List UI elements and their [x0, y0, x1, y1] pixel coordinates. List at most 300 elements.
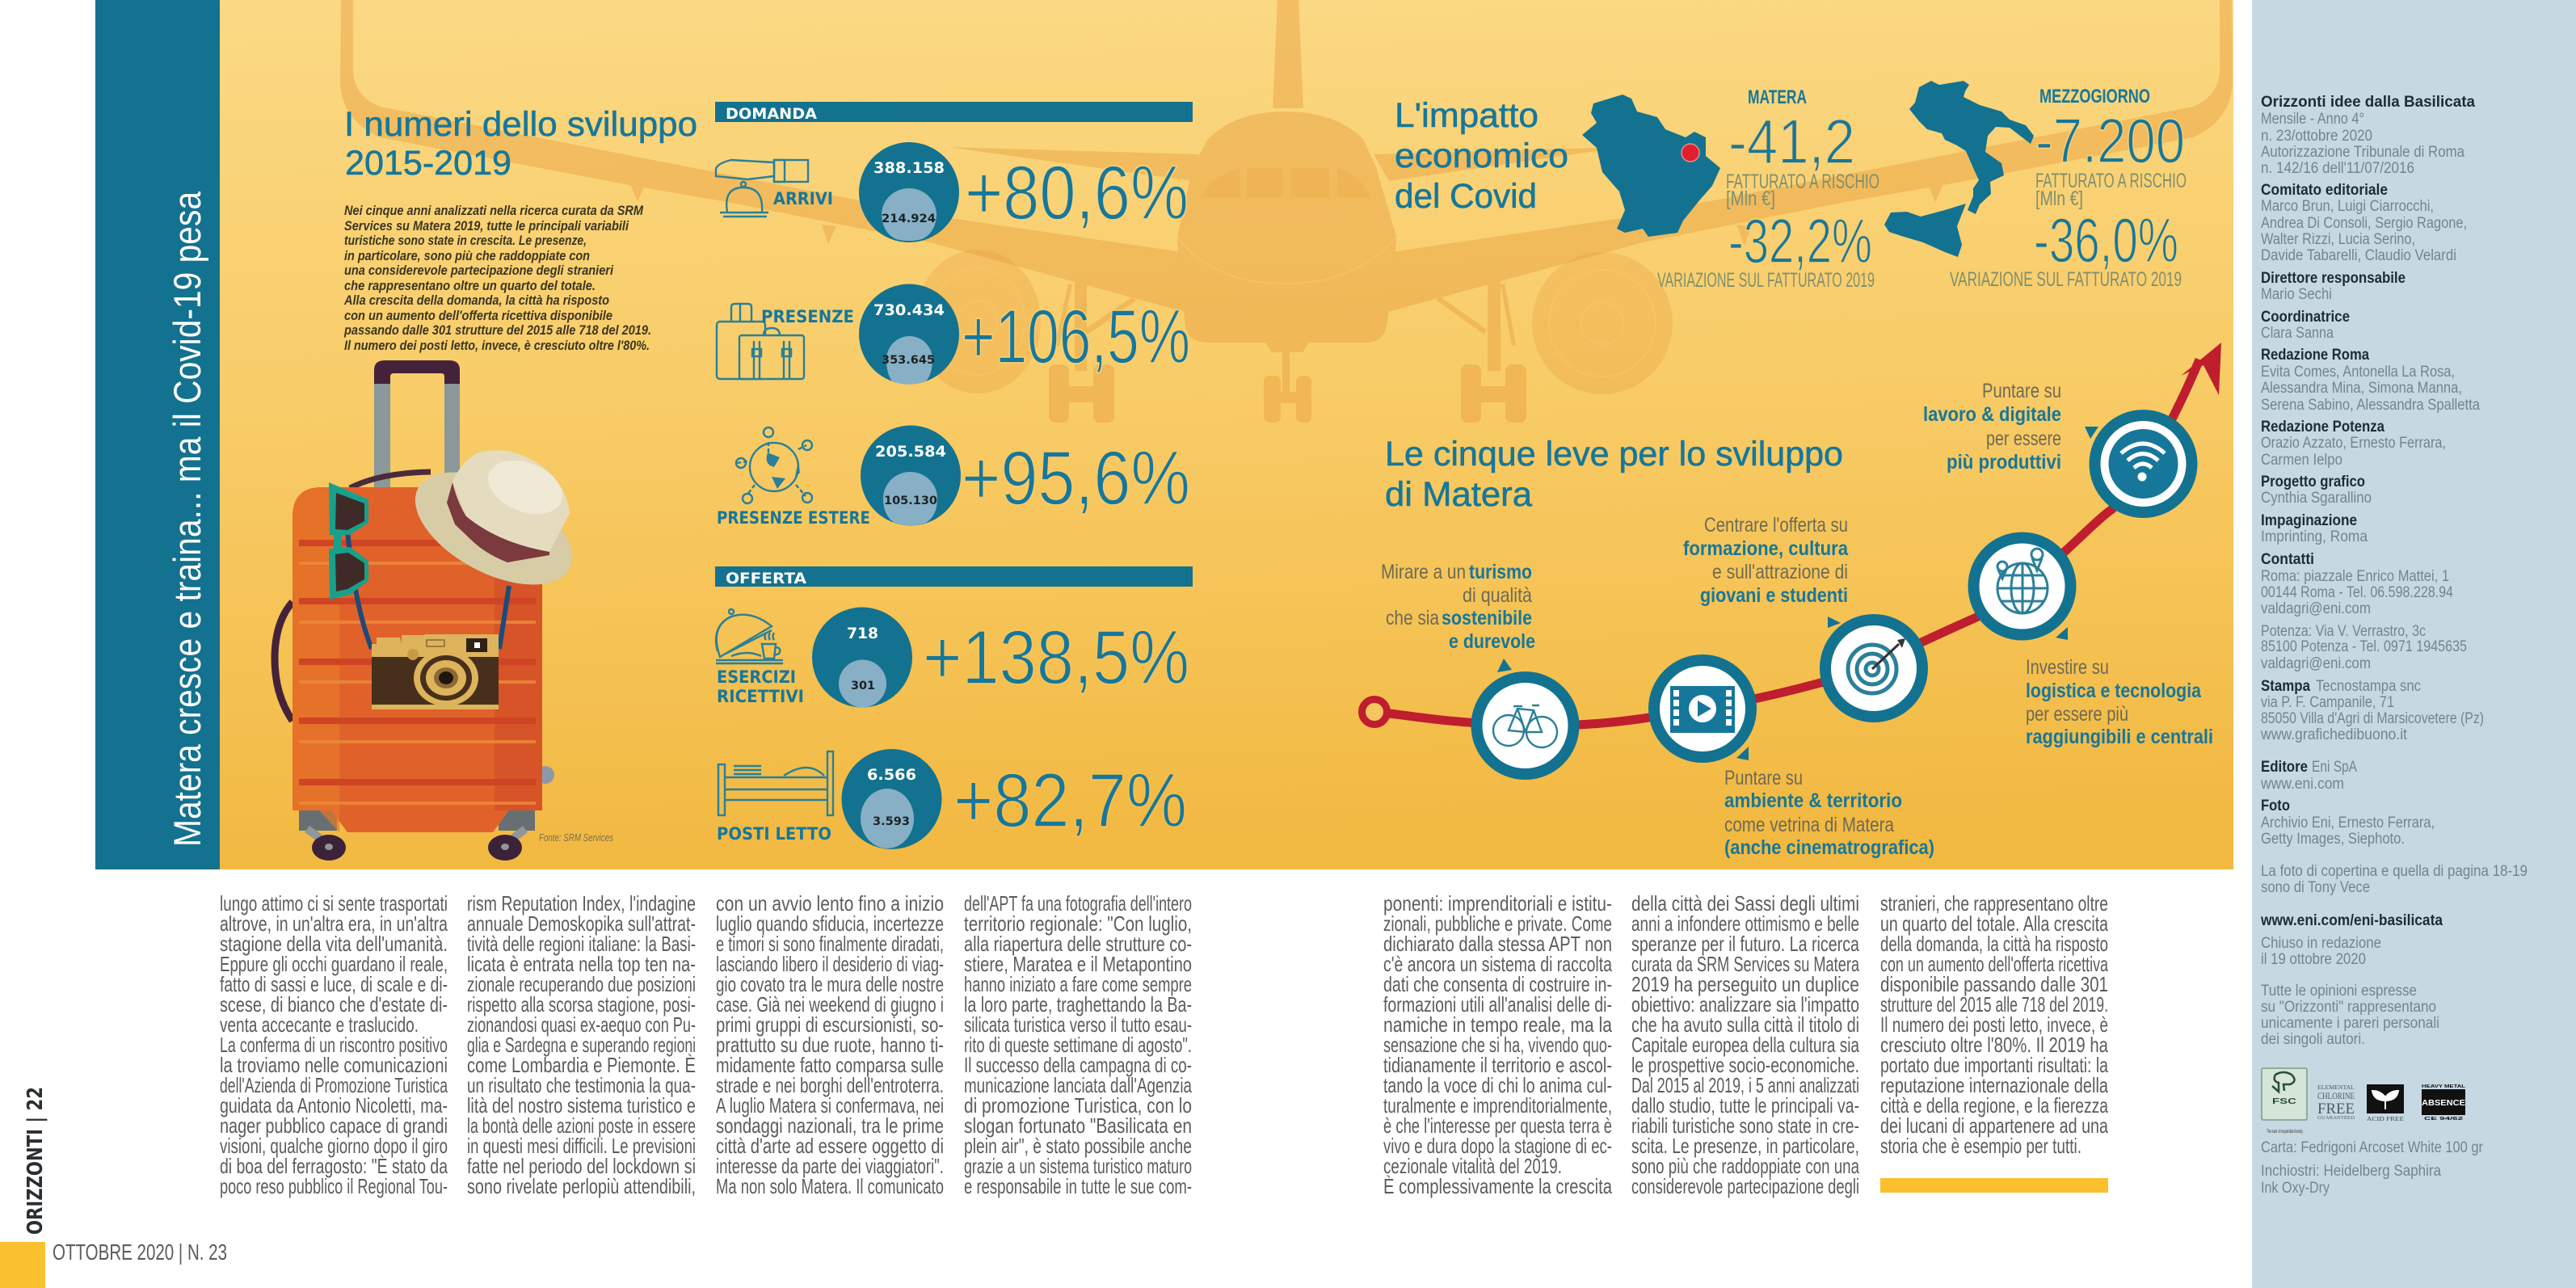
article text: column 6: dallo studio, tutte le principali va- — [1631, 1093, 1859, 1118]
article text: column 2: zionandosi quasi ex-aequo con Pu- — [467, 1012, 696, 1037]
text: lever 3: giovani e studenti — [1700, 584, 1848, 607]
article text: column 2: rispetto alla scorsa stagione, posi- — [467, 992, 696, 1017]
label: Mezzogiorno: MEZZOGIORNO — [2039, 86, 2150, 107]
text block: intro: passando dalle 301 strutture del 2015 alle 718 del 2019. — [343, 322, 651, 338]
panel: infographic background — [219, 0, 2233, 869]
text: lever 1: Mirare a un — [1381, 561, 1466, 583]
article text: column 4: hanno iniziato a fare come sempre — [964, 972, 1192, 996]
article text: column 7: portato due importanti risultati: la — [1880, 1053, 2108, 1077]
value: +138,5%: +138,5% — [923, 615, 1189, 701]
text block: intro: Services su Matera 2019, tutte le principali variabili — [344, 218, 629, 234]
bubble: arrivi values — [859, 142, 959, 242]
row: presenze — [717, 284, 1190, 385]
label: Matera: MATERA — [1748, 86, 1807, 108]
masthead credits: Mario Sechi — [2261, 286, 2332, 303]
paper and ink notes: Carta: Fedrigoni Arcoset White 100 gr — [2261, 1139, 2484, 1156]
logo: acid free — [2367, 1084, 2404, 1122]
article text: column 3 — [716, 891, 944, 1198]
bubble: presenze estere values: 205.584 — [875, 443, 946, 461]
bubble: presenze estere values: 105.130 — [884, 495, 937, 507]
masthead credits: Marco Brun, Luigi Ciarrocchi, — [2261, 198, 2434, 215]
value: +80,6%: +80,6% — [965, 150, 1189, 236]
masthead credits: valdagri@eni.com — [2261, 600, 2371, 617]
top strap — [350, 472, 431, 488]
lever 5: work and digital — [1923, 380, 2198, 518]
article text: column 3: sondaggi nazionali, tra le prime — [716, 1113, 944, 1138]
heading: L'impatto economico del Covid: economico — [1395, 137, 1568, 175]
article text: column 3: lasciando libero il desiderio di viag- — [716, 952, 944, 976]
article text: column 1: nager pubblico capace di grandi — [220, 1113, 448, 1138]
article text: column 5: dati che consenta di costruire in- — [1383, 972, 1612, 996]
hat — [398, 449, 590, 608]
text: lever 3 — [1683, 514, 1849, 607]
article text: column 3: midamente fatto comparsa sulle — [716, 1053, 944, 1077]
article text: column 6: curata da SRM Services su Matera — [1631, 952, 1859, 976]
article text: column 7: disponibile passando dalle 301 — [1880, 972, 2108, 996]
map: southern Italy — [1884, 81, 2034, 257]
pointer — [1828, 617, 1841, 628]
article text: column 4: dell'APT fa una fotografia dell'intero — [964, 891, 1192, 915]
label: arrivi: ARRIVI — [773, 189, 833, 208]
article text: column 6: che ha avuto sulla città il titolo di — [1631, 1012, 1859, 1037]
section bar: DOMANDA — [715, 102, 1193, 123]
logo: heavy metal absence: HEAVY METAL — [2422, 1084, 2465, 1089]
article text: column 1: venta accecante e traslucido. — [220, 1012, 419, 1037]
article text: column 3: primi gruppi di escursionisti, so- — [716, 1012, 944, 1037]
masthead credits: 85100 Potenza - Tel. 0971 1945635 — [2261, 638, 2467, 655]
caption: fatturato a rischio: FATTURATO A RISCHIO — [2035, 170, 2187, 192]
article text: column 3: strade e nei borghi dell'entroterra. — [716, 1073, 944, 1097]
heading: I numeri dello sviluppo — [344, 105, 697, 183]
footer: yellow corner tab — [0, 1242, 45, 1288]
heading: Le cinque leve: Le cinque leve per lo sviluppo — [1385, 435, 1843, 474]
label: esercizi ricettivi: RICETTIVI — [717, 687, 804, 706]
bubble: presenze values: 353.645 — [882, 354, 935, 367]
logo: elemental chlorine free: FREE — [2317, 1101, 2355, 1118]
value: -41,2: -41,2 — [1728, 106, 1855, 177]
article text: column 2: sono rivelate perlopiù attendibili, — [467, 1174, 696, 1198]
caption: fatturato a rischio: FATTURATO A RISCHIO — [1726, 170, 1879, 193]
text: lever 2: (anche cinematrografica) — [1724, 836, 1934, 859]
article text: column 3: interesse da parte dei viaggiatori". — [716, 1154, 944, 1178]
text block: intro: Nei cinque anni analizzati nella ricerca curata da SRM — [344, 203, 644, 218]
article text: column 3: città d'arte ad essere oggetto di — [716, 1134, 944, 1158]
bubble: arrivi values: 214.924 — [882, 213, 936, 225]
label: esercizi ricettivi: ESERCIZI — [717, 667, 796, 687]
article text: column 7: strutture del 2015 alle 718 del 2019. — [1880, 992, 2108, 1017]
masthead credits: Editore — [2261, 759, 2308, 776]
paper and ink notes — [2261, 1139, 2484, 1197]
masthead credits: Tecnostampa snc — [2316, 678, 2421, 695]
bubble: posti letto values — [842, 749, 942, 849]
icon: target — [1820, 614, 1928, 722]
logo: elemental chlorine free: CHLORINE — [2317, 1090, 2355, 1101]
article text: column 2: tività delle regioni italiane: la Basi- — [467, 932, 696, 956]
article text: column 1: fatto di sassi e luce, di scale e di- — [220, 972, 448, 996]
article text: column 2: come Lombardia e Piemonte. È — [467, 1053, 696, 1077]
text: lever 5: lavoro & digitale — [1923, 403, 2061, 426]
logo: heavy metal absence — [2422, 1084, 2465, 1122]
icon: bicycle — [1471, 671, 1579, 780]
article text: column 5: turalmente e imprenditorialmente, — [1383, 1093, 1612, 1118]
article text: column 6 — [1631, 891, 1859, 1198]
logo: elemental chlorine free — [2317, 1084, 2355, 1121]
masthead credits: su "Orizzonti" rappresentano — [2261, 999, 2436, 1016]
masthead credits: dei singoli autori. — [2261, 1031, 2365, 1048]
article text: column 4: Il successo della campagna di co- — [964, 1053, 1192, 1077]
stats: Matera — [1657, 86, 1879, 292]
article text: column 5: tidianamente il territorio e ascol- — [1383, 1053, 1612, 1077]
text: lever 4: Investire su — [2026, 656, 2109, 679]
masthead credits: Autorizzazione Tribunale di Roma — [2261, 144, 2464, 161]
article text: column 2: annuale Demoskopika sull'attrat- — [467, 911, 696, 936]
masthead credits: sono di Tony Vece — [2261, 879, 2370, 896]
end-of-article yellow bar — [1880, 1178, 2108, 1193]
article text: column 1: stagione della vita dell'umanità. — [220, 932, 448, 956]
arrow: red growth path — [1362, 343, 2221, 726]
masthead credits: 85050 Villa d'Agri di Marsicovetere (Pz) — [2261, 710, 2484, 727]
label: presenze estere: PRESENZE ESTERE — [717, 508, 870, 528]
text: lever 3: formazione, cultura — [1683, 537, 1849, 560]
masthead credits: Andrea Di Consoli, Sergio Ragone, — [2261, 215, 2467, 232]
article text: column 4 — [964, 891, 1192, 1198]
article text: column 4: e responsabile in tutte le sue com- — [964, 1174, 1192, 1198]
logo: heavy metal absence: ABSENCE — [2422, 1099, 2465, 1108]
side handle — [275, 602, 293, 721]
article text: column 3: luglio quando sfiducia, incertezze — [716, 911, 944, 936]
logo: elemental chlorine free: ELEMENTAL — [2317, 1084, 2355, 1091]
text: lever 5: per essere — [1986, 427, 2061, 450]
text: lever 2: Puntare su — [1724, 767, 1803, 789]
article text: column 7: storia che è esempio per tutti. — [1880, 1134, 2081, 1158]
text: lever 2 — [1724, 767, 1934, 859]
masthead credits: Carmen Ielpo — [2261, 452, 2342, 469]
icon: cloche and coffee — [716, 609, 783, 663]
text: lever 3: e sull'attrazione di — [1712, 561, 1848, 583]
text: lever 1: di qualità — [1463, 584, 1532, 607]
article text: column 3: A luglio Matera si confermava, nei — [716, 1093, 944, 1118]
icon: wifi — [2090, 410, 2198, 518]
masthead credits: Potenza: Via V. Verrastro, 3c — [2261, 623, 2426, 640]
article text: column 1: la troviamo nelle comunicazioni — [220, 1053, 448, 1077]
text block: intro: in particolare, sono più che raddoppiate con — [344, 248, 590, 263]
row: arrivi — [716, 142, 1189, 242]
paper and ink notes: Ink Oxy-Dry — [2261, 1180, 2330, 1197]
text block: intro — [343, 203, 651, 353]
heading: L'impatto economico del Covid: L'impatto — [1395, 96, 1538, 135]
map: Basilicata with Matera marker — [1582, 95, 1720, 237]
article text: column 1: dell'Azienda di Promozione Turistica — [220, 1073, 448, 1097]
icon: globe network — [736, 427, 812, 503]
article text: column 6: considerevole partecipazione degli — [1631, 1174, 1859, 1198]
article text: column 6: riabili turistiche sono state in cre- — [1631, 1113, 1859, 1138]
article text: column 7: cresciuto oltre l'80%. Il 2019 ha — [1880, 1033, 2108, 1057]
article text: column 7: un quarto del totale. Alla crescita — [1880, 911, 2108, 936]
heading: I numeri dello sviluppo: I numeri dello sviluppo — [344, 105, 697, 144]
masthead credits: La foto di copertina e quella di pagina 18-19 — [2261, 863, 2528, 880]
masthead credits: Davide Tabarelli, Claudio Velardi — [2261, 247, 2456, 264]
article text: column 1: La conferma di un riscontro positivo — [220, 1033, 448, 1057]
article text: column 5: sensazione che si ha, vivendo quo- — [1383, 1033, 1612, 1057]
article text: column 5: cezionale vitalità del 2019. — [1383, 1154, 1562, 1178]
article text: column 7: dei lucani di appartenere ad una — [1880, 1113, 2108, 1138]
text: lever 4 — [2026, 656, 2213, 748]
masthead credits: Cynthia Sgarallino — [2261, 490, 2372, 507]
text: lever 5 — [1923, 380, 2061, 474]
masthead credits: n. 142/16 dell'11/07/2016 — [2261, 160, 2414, 177]
article text: column 4: alla riapertura delle strutture co- — [964, 932, 1192, 956]
masthead credits: Orizzonti idee dalla Basilicata — [2261, 94, 2475, 111]
value: -7.200: -7.200 — [2035, 105, 2185, 176]
row: esercizi ricettivi — [716, 608, 1189, 708]
footer: vertical magazine title and page number: ORIZZONTI | 22 — [23, 1087, 48, 1235]
masthead credits: www.eni.com/eni-basilicata — [2260, 912, 2443, 929]
caption: fatturato a rischio — [2035, 170, 2187, 210]
article text: column 3: con un avvio lento fino a inizio — [716, 891, 944, 915]
article text: column 6: anni a infondere ottimismo e belle — [1631, 911, 1859, 936]
article text: column 7: della domanda, la città ha risposto — [1880, 932, 2108, 956]
text block: intro: Il numero dei posti letto, invece, è cresciuto oltre l'80%. — [344, 338, 650, 353]
article text: column 3: e timori si sono finalmente diradati, — [716, 932, 944, 956]
heading: L'impatto economico del Covid: del Covid — [1395, 177, 1537, 216]
article text: column 4: la loro parte, traghettando la Ba- — [964, 992, 1192, 1017]
masthead credits: Contatti — [2261, 551, 2314, 568]
text block: intro: con un aumento dell'offerta ricettiva disponibile — [344, 308, 612, 323]
masthead credits: www.eni.com — [2260, 776, 2344, 793]
bubble: esercizi values: 718 — [847, 625, 878, 642]
masthead credits: Roma: piazzale Enrico Mattei, 1 — [2261, 568, 2449, 585]
value: +106,5%: +106,5% — [962, 294, 1190, 380]
sunglasses — [329, 482, 368, 600]
caption: variazione: VARIAZIONE SUL FATTURATO 2019 — [1657, 269, 1875, 292]
article text: column 1: poco reso pubblico il Regional Tou- — [220, 1174, 448, 1198]
icon: globe with pins — [1968, 532, 2077, 640]
article text: column 4: slogan fortunato "Basilicata en — [964, 1113, 1192, 1138]
article text: column 3: prattutto su due ruote, hanno ti- — [716, 1033, 944, 1057]
text: lever 5: più produttivi — [1947, 451, 2061, 474]
article text: column 5: tando la voce di chi lo anima cul- — [1383, 1073, 1612, 1097]
caption: fatturato a rischio — [1726, 170, 1879, 210]
article text: column 1: altrove, in un'altra era, in un'altra — [220, 911, 448, 936]
telescopic handle — [374, 360, 460, 489]
masthead credits: Foto — [2261, 798, 2290, 814]
text: lever 1: turismo — [1469, 561, 1532, 583]
masthead credits: Evita Comes, Antonella La Rosa, — [2261, 364, 2455, 381]
masthead credits: via P. F. Campanile, 71 — [2261, 694, 2394, 711]
article text: column 5: vivo e dura dopo la stagione di ec- — [1383, 1134, 1612, 1158]
article text: column 4: plein air", è stato possibile anche — [964, 1134, 1192, 1158]
article text: column 5: zionali, pubbliche e private. Come — [1383, 911, 1612, 936]
article text: column 6: sono più che raddoppiate con una — [1631, 1154, 1859, 1178]
text block: intro: che rappresentano oltre un quarto del totale. — [344, 278, 596, 293]
text: lever 4: per essere più — [2026, 703, 2128, 726]
lever 1: sustainable tourism — [1381, 561, 1579, 780]
masthead credits: Imprinting, Roma — [2261, 528, 2368, 545]
article text: column 2: un risultato che testimonia la qua- — [467, 1073, 696, 1097]
paper and ink notes: Inchiostri: Heidelberg Saphira — [2261, 1163, 2441, 1180]
panel: masthead sidebar — [2252, 0, 2576, 1288]
bubble: posti letto values: 6.566 — [867, 766, 916, 784]
bubble: presenze values — [859, 284, 959, 385]
logo: FSC: FSC — [2272, 1097, 2296, 1106]
masthead credits: 00144 Roma - Tel. 06.598.228.94 — [2261, 584, 2453, 601]
masthead credits: Direttore responsabile — [2261, 270, 2406, 287]
text: lever 1 — [1381, 561, 1535, 653]
text block: intro: turistiche sono state in crescita. Le presenze, — [344, 233, 587, 248]
bubble: posti letto values: 3.593 — [873, 815, 910, 828]
article text: column 1: di boa del ferragosto: "È stato da — [220, 1154, 448, 1178]
logo: acid free: ACID FREE — [2367, 1116, 2404, 1122]
masthead credits: Impaginazione — [2261, 512, 2357, 529]
icon: luggage — [717, 304, 804, 379]
bubble: esercizi values — [812, 608, 912, 708]
logo: elemental chlorine free: GUARANTEED — [2317, 1116, 2355, 1121]
panel: teal side banner — [95, 0, 220, 869]
pointer — [1497, 659, 1512, 672]
article text: column 4: rito di queste settimane di agosto". — [964, 1033, 1192, 1057]
pointer — [2056, 627, 2068, 640]
source note: Fonte: SRM Services — [539, 831, 613, 844]
article text: column 7: reputazione internazionale della — [1880, 1073, 2108, 1097]
illustration: suitcase with hat, sunglasses and camera — [275, 360, 590, 861]
article text: column 7: Il numero dei posti letto, invece, è — [1880, 1012, 2108, 1037]
wheels — [299, 766, 554, 861]
illustration: airplane silhouette — [340, 0, 2233, 423]
icon: hand ringing bell — [716, 160, 808, 217]
article text: column 5 — [1383, 891, 1612, 1198]
caption: fatturato a rischio: [Mln €] — [1726, 187, 1775, 210]
caption: fatturato a rischio: [Mln €] — [2035, 187, 2083, 210]
article text: column 1: visioni, qualche giorno dopo il giro — [220, 1134, 448, 1158]
text: lever 2: ambiente & territorio — [1724, 789, 1902, 812]
masthead credits: Serena Sabino, Alessandra Spalletta — [2261, 397, 2480, 414]
value: -32,2%: -32,2% — [1728, 205, 1872, 276]
article text: column 4: municazione lanciata dall'Agenzia — [964, 1073, 1192, 1097]
article text: column 5: formazioni utili all'analisi delle di- — [1383, 992, 1612, 1017]
article text: column 4: territorio regionale: "Con luglio, — [964, 911, 1192, 936]
label: posti letto: POSTI LETTO — [717, 824, 831, 844]
article text: column 1: guidata da Antonio Nicoletti, ma- — [220, 1093, 448, 1118]
value: +95,6%: +95,6% — [962, 436, 1190, 521]
bubble: presenze values: 730.434 — [873, 301, 945, 319]
article text: column 2: zionale recuperando due posizioni — [467, 972, 696, 996]
logo: FSC — [2262, 1068, 2307, 1134]
lever 3: training and culture — [1683, 514, 1928, 722]
masthead credits: Getty Images, Siephoto. — [2261, 831, 2405, 848]
masthead credits: Chiuso in redazione — [2261, 935, 2381, 952]
text: lever 1: e durevole — [1449, 630, 1535, 653]
camera — [372, 634, 499, 709]
article text: column 6: 2019 ha perseguito un duplice — [1631, 972, 1859, 996]
masthead credits: Mensile - Anno 4° — [2261, 111, 2364, 128]
pointer — [2085, 427, 2098, 439]
masthead credits: Stampa — [2261, 678, 2310, 695]
article text: column 7: stranieri, che rappresentano oltre — [1880, 891, 2108, 915]
masthead credits: Redazione Roma — [2261, 347, 2369, 364]
article text: column 2: glia e Sardegna e superando regioni — [467, 1033, 696, 1057]
bubble: arrivi values: 388.158 — [873, 159, 945, 177]
article text: column 2: licata è entrata nella top ten na- — [467, 952, 696, 976]
article text: column 7: città e della regione, e la fierezza — [1880, 1093, 2108, 1118]
logo: FSC: The mark of responsible forestry — [2267, 1130, 2303, 1134]
masthead credits: www.grafichedibuono.it — [2260, 726, 2408, 743]
article text: column 4: stiere, Maratea e il Metapontino — [964, 952, 1192, 976]
masthead credits: Redazione Potenza — [2261, 419, 2384, 436]
section bar: OFFERTA: OFFERTA — [726, 570, 806, 587]
article text: column 4: silicata turistica verso il tutto esau- — [964, 1012, 1192, 1037]
article text: column 7 — [1880, 891, 2108, 1158]
banner title: Matera cresce e traina... ma il Covid-19 pesa — [166, 191, 208, 847]
text: lever 4: raggiungibili e centrali — [2026, 726, 2213, 748]
row: posti letto — [717, 749, 1187, 849]
article text: column 5: È complessivamente la crescita — [1383, 1174, 1612, 1198]
article text: column 2: lità del nostro sistema turistico e — [467, 1093, 696, 1118]
article text: column 1: lungo attimo ci si sente trasportati — [220, 891, 448, 915]
masthead credits: unicamente i pareri personali — [2261, 1015, 2439, 1032]
value: -36,0%: -36,0% — [2034, 204, 2178, 276]
article text: column 6: Dal 2015 al 2019, i 5 anni analizzati — [1631, 1073, 1859, 1097]
masthead credits — [2260, 94, 2528, 1048]
heading: Le cinque leve: di Matera — [1385, 475, 1532, 514]
label: presenze: PRESENZE — [761, 307, 854, 326]
article text: column 6: della città dei Sassi degli ultimi — [1631, 891, 1859, 915]
article text: column 6: scita. Le presenze, in particolare, — [1631, 1134, 1859, 1158]
value: +82,7%: +82,7% — [953, 758, 1187, 844]
text: lever 1: che sia — [1386, 607, 1439, 629]
text: lever 3: Centrare l'offerta su — [1704, 514, 1848, 537]
article text: column 3: Ma non solo Matera. Il comunicato — [716, 1174, 944, 1198]
article text: column 6: obiettivo: analizzare sia l'impatto — [1631, 992, 1859, 1017]
icon: bed — [718, 751, 833, 815]
label: esercizi ricettivi — [717, 667, 804, 706]
masthead credits: Eni SpA — [2312, 759, 2357, 776]
logo: heavy metal absence: CE 94/62 — [2424, 1117, 2463, 1122]
article text: column 5: ponenti: imprenditoriali e istitu- — [1383, 891, 1612, 915]
text: lever 4: logistica e tecnologia — [2026, 680, 2202, 702]
footer: issue date: OTTOBRE 2020 | N. 23 — [53, 1240, 227, 1265]
article text: column 6: speranze per il futuro. La ricerca — [1631, 932, 1859, 956]
article text: column 4: grazie a un sistema turistico maturo — [964, 1154, 1192, 1178]
article text: column 1: scese, di bianco che d'estate di- — [220, 992, 448, 1017]
article text: column 6: le prospettive socio-economiche. — [1631, 1053, 1859, 1077]
article text: column 3: gio covato tra le mura delle nostre — [716, 972, 944, 996]
article text: column 2: rism Reputation Index, l'indagine — [467, 891, 696, 915]
article text: column 4: di promozione Turistica, con lo — [964, 1093, 1192, 1118]
heading: L'impatto economico del Covid — [1395, 96, 1568, 216]
article text: column 2: fatte nel periodo del lockdown si — [467, 1154, 696, 1178]
article text: column 1 — [220, 891, 448, 1198]
article text: column 5: namiche in tempo reale, ma la — [1383, 1012, 1612, 1037]
icon: film strip — [1648, 655, 1757, 763]
masthead credits: Alessandra Mina, Simona Manna, — [2261, 380, 2462, 397]
text: lever 1: sostenibile — [1442, 607, 1532, 629]
masthead credits: Clara Sanna — [2261, 325, 2334, 342]
article text: column 5: c'è ancora un sistema di raccolta — [1383, 952, 1612, 976]
pointer — [1736, 747, 1749, 760]
article text: column 5: è che l'interesse per questa terra è — [1383, 1113, 1612, 1138]
article text: column 2: in questi mesi difficili. Le previsioni — [467, 1134, 696, 1158]
article text: column 3: case. Già nei weekend di giugno i — [716, 992, 944, 1017]
masthead credits: n. 23/ottobre 2020 — [2261, 128, 2372, 145]
section bar: OFFERTA — [715, 566, 1193, 587]
masthead credits: Archivio Eni, Ernesto Ferrara, — [2261, 814, 2435, 831]
article text: column 1: Eppure gli occhi guardano il reale, — [220, 952, 448, 976]
text: lever 5: Puntare su — [1982, 380, 2061, 402]
article text: column 2 — [467, 891, 696, 1198]
article text: column 2: la bontà delle azioni poste in essere — [467, 1113, 696, 1138]
section bar: DOMANDA: DOMANDA — [726, 105, 817, 123]
stats: Mezzogiorno — [1950, 86, 2187, 291]
